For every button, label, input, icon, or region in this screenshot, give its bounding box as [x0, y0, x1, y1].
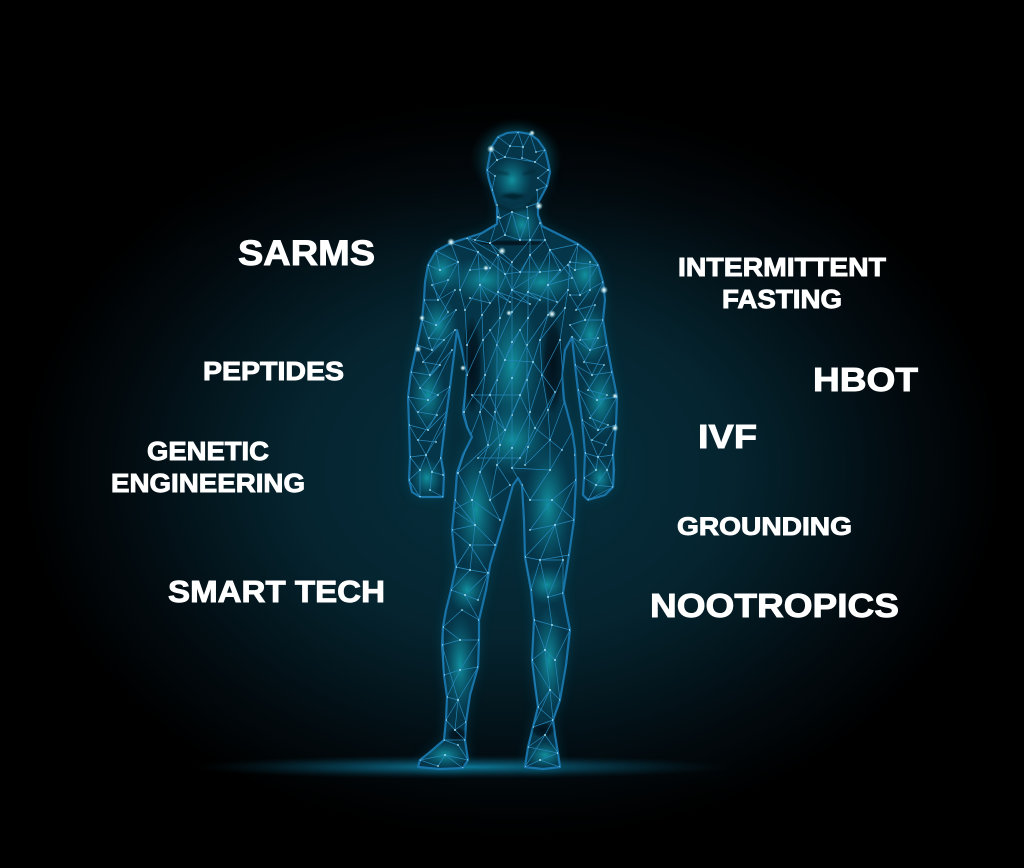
- label: IVF: IVF: [698, 418, 757, 455]
- label: INTERMITTENT FASTING: INTERMITTENT: [678, 252, 886, 282]
- body silhouette: [408, 132, 617, 769]
- label: GENETIC ENGINEERING: ENGINEERING: [111, 468, 305, 498]
- right hand mesh: [584, 453, 613, 500]
- left hand mesh: [409, 455, 443, 497]
- head halo: [470, 118, 562, 198]
- polygon mesh lines: [408, 132, 617, 768]
- label: PEPTIDES: PEPTIDES: [203, 356, 344, 386]
- label: GROUNDING: GROUNDING: [677, 513, 852, 541]
- human figure: [408, 118, 618, 769]
- extra abdomen detail: [472, 330, 562, 458]
- label: INTERMITTENT FASTING: FASTING: [722, 284, 842, 314]
- label: SARMS: SARMS: [238, 234, 375, 273]
- label: HBOT: HBOT: [813, 361, 918, 398]
- extra chest detail: [470, 250, 572, 290]
- label: INTERMITTENT FASTING: [678, 252, 886, 314]
- label: GENETIC ENGINEERING: [111, 436, 305, 498]
- right arm detail: [576, 262, 608, 445]
- outer body glow: [408, 132, 617, 769]
- labels: left side: [111, 234, 385, 609]
- right arm mesh: [575, 244, 617, 457]
- abdomen mesh: [467, 340, 563, 380]
- label: SMART TECH: SMART TECH: [168, 574, 385, 609]
- neck mesh: [467, 212, 545, 243]
- darker shadow panels: [462, 320, 481, 410]
- labels: right side: [650, 252, 918, 624]
- face features: [497, 171, 536, 211]
- left arm detail: [418, 280, 448, 442]
- head mesh: [487, 132, 548, 218]
- chest mesh: [458, 250, 570, 292]
- label: GENETIC ENGINEERING: GENETIC: [147, 436, 269, 466]
- body inner glows: [410, 156, 618, 769]
- bright nodes: [414, 130, 618, 432]
- left arm mesh: [408, 251, 440, 457]
- right leg mesh: [512, 468, 576, 560]
- left leg mesh: [453, 465, 510, 525]
- label: NOOTROPICS: NOOTROPICS: [650, 587, 899, 624]
- floor glow: [192, 755, 732, 779]
